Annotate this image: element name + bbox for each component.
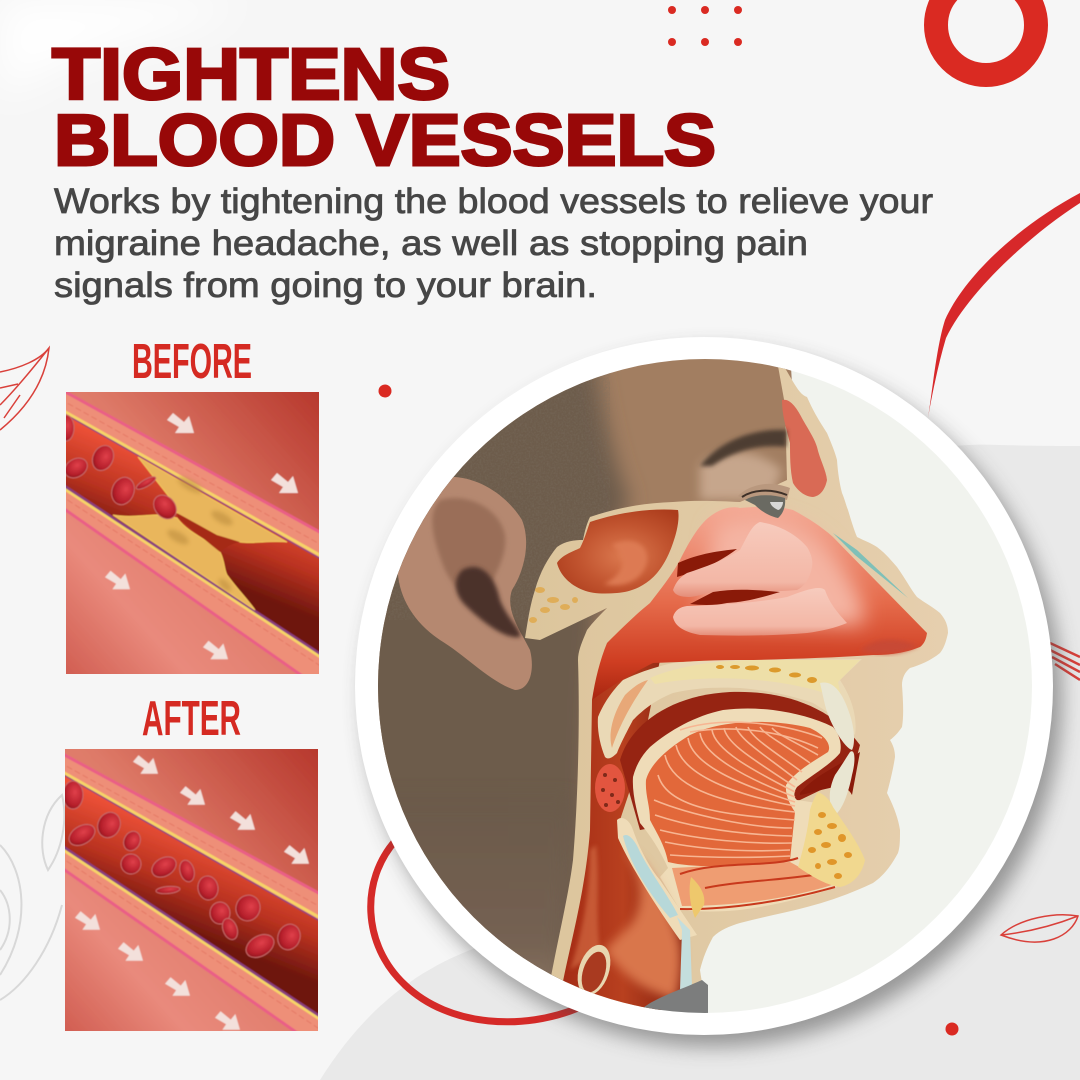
description text: Works by tightening the blood vessels to relieve your	[54, 182, 933, 221]
title	[52, 35, 716, 181]
title: BLOOD VESSELS	[54, 101, 716, 181]
flow arrows	[75, 755, 309, 1030]
spongy bone near ear	[529, 587, 578, 623]
upper vessel wall	[60, 389, 325, 562]
nasal slit middle	[690, 590, 780, 605]
palate	[598, 659, 862, 758]
description text	[54, 182, 933, 305]
heading: after: AFTER	[142, 692, 241, 746]
plaque	[113, 457, 287, 610]
lower nose shading	[860, 640, 918, 654]
front teeth	[820, 682, 854, 815]
throat red	[563, 662, 682, 1010]
nasal slit upper	[677, 549, 737, 577]
back throat highlight	[570, 845, 600, 970]
cream tissue section	[525, 366, 948, 1010]
red blood cells	[63, 781, 304, 962]
flow arrows	[105, 413, 298, 659]
oral cavity	[620, 692, 860, 830]
lower vessel wall	[59, 844, 324, 1037]
decorative dots	[378, 384, 958, 1036]
collar	[640, 980, 708, 1020]
white circle with shadow	[355, 337, 1062, 1047]
jaw bone	[798, 792, 865, 887]
decorative red brush stroke	[928, 193, 1080, 418]
description text: signals from going to your brain.	[54, 266, 597, 305]
vessel lumen	[59, 773, 324, 1019]
anatomy head illustration	[378, 359, 1032, 1013]
narrowed channel	[177, 513, 240, 552]
leaf left	[0, 348, 49, 430]
pink mucosa glow	[700, 517, 864, 625]
sphenoid sinus	[557, 510, 679, 594]
nasal cartilage strip	[833, 533, 908, 598]
heading: before: BEFORE	[132, 335, 252, 389]
decorative dot grid	[668, 6, 742, 46]
leaf bottom right	[1001, 915, 1078, 942]
decorative red ring	[936, 0, 1036, 75]
panel: after blood vessel	[59, 743, 324, 1037]
upper vessel wall	[59, 752, 324, 924]
epiglottis	[617, 818, 704, 990]
gray leaves lower left	[0, 795, 64, 1000]
trachea section	[572, 941, 616, 999]
tongue muscle fibres	[654, 722, 822, 857]
tongue	[633, 708, 841, 912]
eye	[738, 484, 790, 518]
mouth gap	[800, 752, 860, 795]
vessel lumen	[60, 412, 325, 657]
red blood cells	[66, 414, 178, 520]
tonsil	[595, 764, 625, 812]
plaque shading	[165, 474, 235, 593]
nasal cavity	[592, 507, 927, 700]
head skin	[378, 359, 792, 989]
decorative red strokes right	[1050, 643, 1080, 680]
lower turbinate	[673, 588, 847, 636]
title: TIGHTENS	[52, 35, 450, 115]
laryngeal folds	[605, 850, 681, 1000]
description text: migraine headache, as well as stopping pain	[54, 224, 808, 263]
hair stubble	[389, 374, 610, 617]
lower vessel wall	[60, 483, 325, 680]
frontal sinus	[782, 400, 827, 497]
panel: before blood vessel	[58, 386, 325, 680]
eyebrow	[700, 430, 787, 466]
decorative brush ring	[371, 840, 578, 1022]
ear	[398, 477, 532, 690]
upper turbinate	[673, 522, 812, 597]
